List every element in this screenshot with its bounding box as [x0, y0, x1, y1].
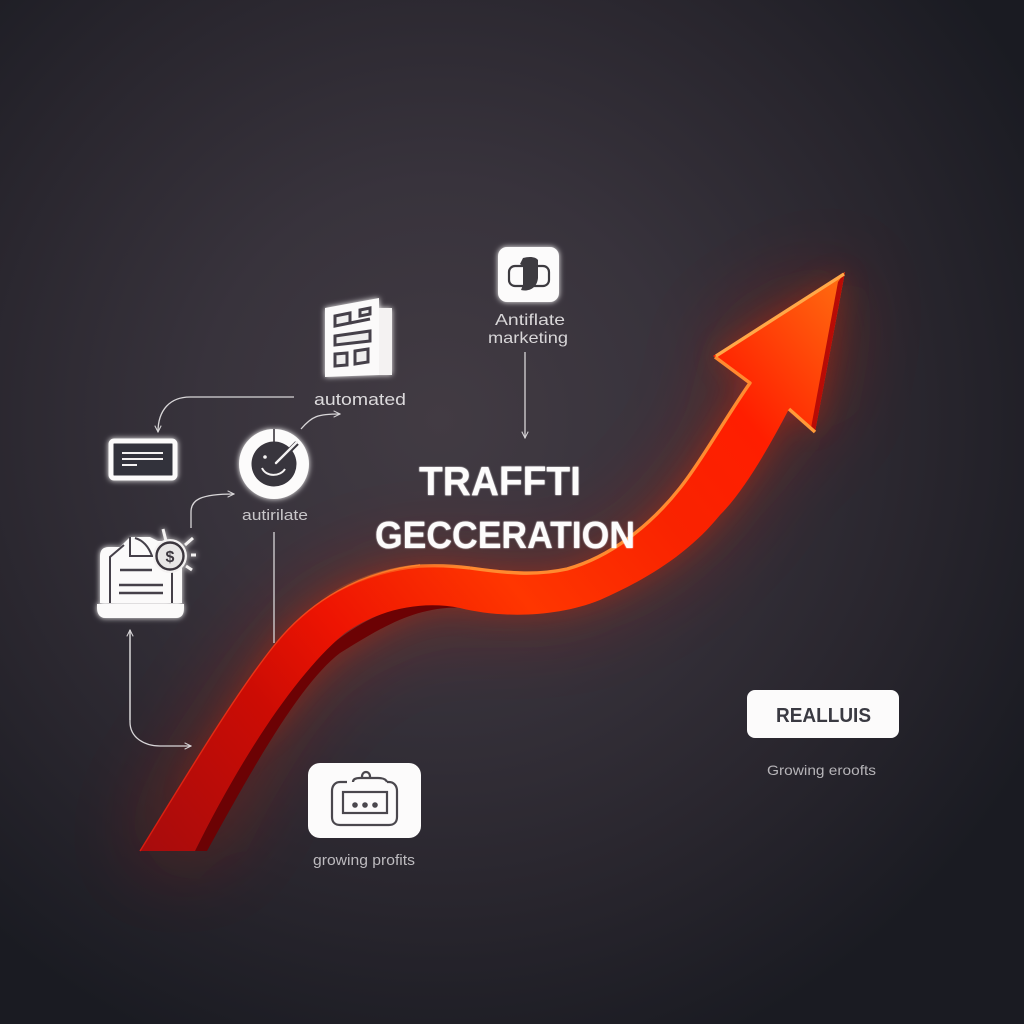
icon: text card [111, 441, 175, 478]
label: Growing eroofts: Growing eroofts [767, 762, 876, 778]
badge: REALLUIS [747, 690, 899, 738]
label: growing profits: growing profits [313, 853, 415, 869]
arrow underside shadow [195, 602, 470, 851]
arrow top rim [140, 565, 420, 851]
arrow shaft bevel [470, 357, 750, 573]
title [375, 458, 635, 557]
connector: gauge to automated [301, 414, 340, 429]
arrow shaft bevel fade [320, 566, 470, 601]
label: autirilate: autirilate [242, 508, 308, 524]
connector lines [130, 352, 525, 746]
label: automated: automated [314, 391, 406, 409]
icon: bag tile [308, 763, 421, 838]
arrow head right side [811, 272, 845, 432]
arrow barb bevel [789, 409, 815, 432]
badge: REALLUIS: REALLUIS [776, 704, 871, 727]
arrow near glow [180, 272, 845, 800]
arrow head top bevel [716, 274, 844, 356]
title: GECCERATION [375, 515, 635, 557]
icon: gauge face [239, 429, 309, 499]
label: Antiflate marketing: marketing [488, 330, 568, 347]
arrow wide glow [140, 272, 845, 851]
connector: marketing to title [524, 352, 526, 438]
growth arrow [140, 272, 845, 851]
title: TRAFFTI [419, 458, 581, 504]
connector: laptop to gauge [191, 494, 234, 528]
connector: vertical to arrow [273, 532, 275, 643]
label: Antiflate marketing: Antiflate [495, 312, 565, 329]
icon: laptop with document and coin [97, 529, 196, 618]
connector: arrowhead up to laptop [129, 630, 131, 720]
icon: dollar coin: $ [166, 549, 175, 566]
connector: automated to card [158, 397, 294, 432]
arrow body [140, 272, 845, 851]
connector: laptop to arrow [130, 630, 191, 746]
icon: report document [325, 298, 392, 377]
icon: marketing tile [498, 247, 559, 302]
label: Antiflate marketing [488, 312, 568, 347]
